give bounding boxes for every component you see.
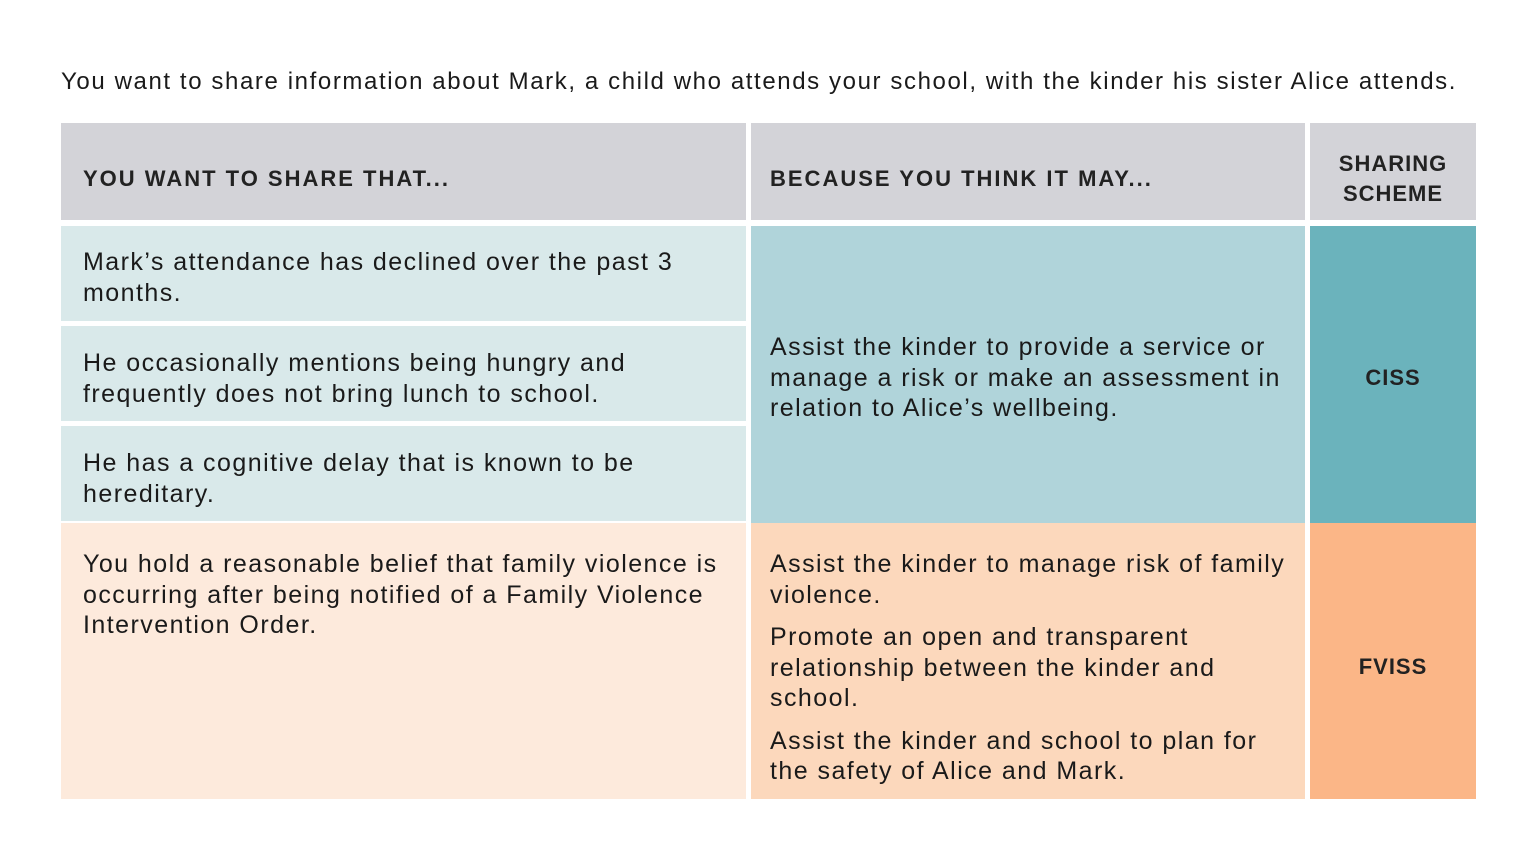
scheme: FVISS: FVISS <box>1359 654 1427 679</box>
header: because you think it may <box>751 123 1305 220</box>
row: hungry <box>61 326 746 421</box>
row: family violence: You hold a reasonable belief that family violence is <box>83 550 718 578</box>
fviss reasons: the safety of Alice and Mark. <box>770 757 1126 785</box>
fviss reasons: Assist the kinder and school to plan for <box>770 726 1257 754</box>
row: cognitive delay <box>61 426 746 521</box>
fviss reasons: Assist the kinder to manage risk of family <box>770 550 1285 578</box>
ciss reason <box>751 226 1305 523</box>
intro text: You want to share information about Mark, a child who attends your school, with the kinder his sister Alice attends. <box>61 68 1457 95</box>
header: because you think it may: BECAUSE YOU THINK IT MAY... <box>770 166 1153 191</box>
row: hungry: He occasionally mentions being hungry and <box>83 349 626 377</box>
fviss reasons: violence. <box>770 580 882 608</box>
row: attendance: months. <box>83 278 182 306</box>
row: cognitive delay: hereditary. <box>83 480 215 508</box>
ciss reason: manage a risk or make an assessment in <box>770 364 1281 392</box>
scheme: FVISS <box>1310 523 1476 799</box>
fviss reasons: relationship between the kinder and <box>770 654 1215 682</box>
row: family violence: occurring after being notified of a Family Violence <box>83 580 704 608</box>
fviss reasons: Promote an open and transparent <box>770 623 1189 651</box>
ciss reason: Assist the kinder to provide a service or <box>770 333 1266 361</box>
header: sharing scheme <box>1310 123 1476 220</box>
row: attendance: Mark’s attendance has declined over the past 3 <box>83 248 673 276</box>
header: sharing scheme: SCHEME <box>1343 181 1443 206</box>
header: you want to share that: YOU WANT TO SHARE THAT... <box>83 166 450 191</box>
header: you want to share that <box>61 123 746 220</box>
row: attendance <box>61 226 746 321</box>
row: family violence: Intervention Order. <box>83 611 318 639</box>
scheme: CISS: CISS <box>1365 365 1421 390</box>
header: sharing scheme: SHARING <box>1339 151 1447 176</box>
row: family violence <box>61 523 746 799</box>
scheme: CISS <box>1310 226 1476 523</box>
fviss reasons <box>751 523 1305 799</box>
row: hungry: frequently does not bring lunch to school. <box>83 380 600 408</box>
fviss reasons: school. <box>770 684 859 712</box>
row: cognitive delay: He has a cognitive delay that is known to be <box>83 449 635 477</box>
ciss reason: relation to Alice’s wellbeing. <box>770 394 1119 422</box>
